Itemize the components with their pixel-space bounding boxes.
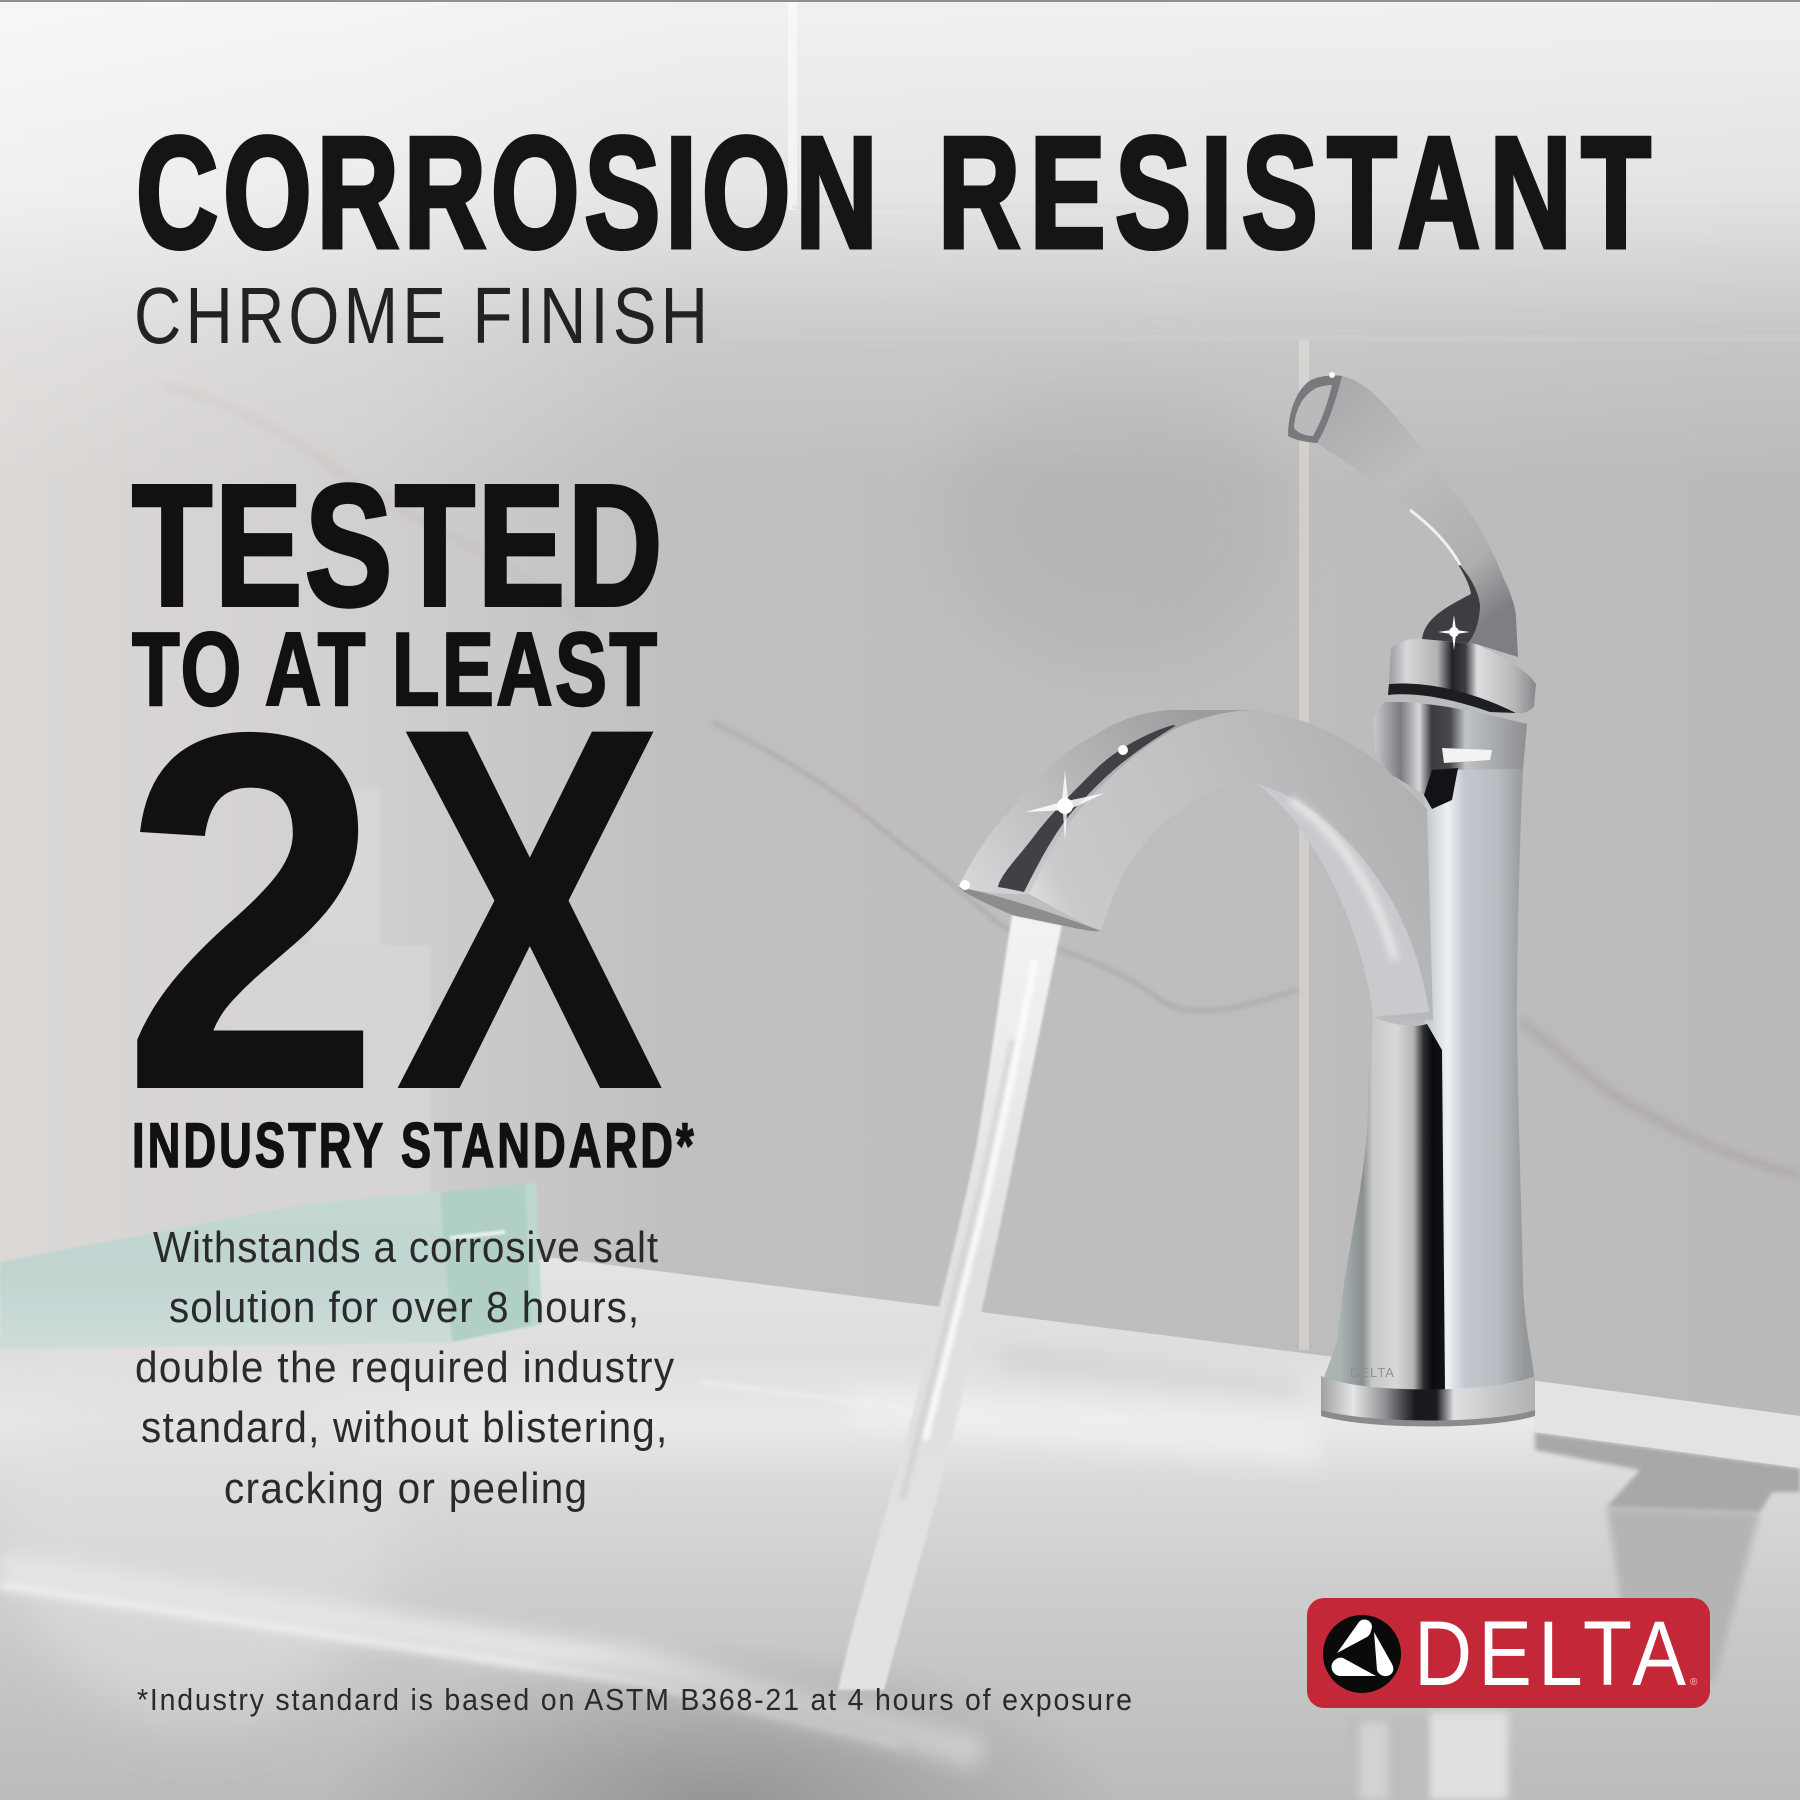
marble vein right: [1520, 1020, 1800, 1175]
footnote: *Industry standard is based on ASTM B368-21 at 4 hours of exposure: [137, 1683, 1132, 1717]
marble vein centre: [712, 722, 1298, 1011]
2X: X: [394, 619, 667, 1198]
tested: TESTED: [132, 448, 662, 642]
title: RESISTANT: [938, 105, 1651, 281]
Delta logo: [1307, 1598, 1710, 1708]
body text: [135, 1222, 675, 1512]
bottom shadow: [250, 1640, 1200, 1800]
registered mark: ®: [1690, 1677, 1698, 1688]
counter white ledge: [1530, 1380, 1800, 1468]
faucet shadow upper: [1535, 1432, 1800, 1512]
counter reflection: [1347, 1712, 1508, 1800]
handle end cap: [1288, 375, 1342, 443]
title: [136, 105, 1651, 281]
ring: [1389, 639, 1536, 713]
handle dark inner: [1422, 560, 1480, 643]
spout dark highlight: [998, 725, 1175, 892]
top wash: [0, 0, 1800, 480]
faucet shadow lower: [1607, 1507, 1760, 1695]
faucet: [958, 372, 1536, 1426]
counter left glow: [0, 1280, 400, 1720]
2X: [121, 619, 667, 1198]
spout aerator: [958, 887, 1101, 931]
spout underside reflection: [1257, 784, 1429, 1017]
logo mark: [1323, 1615, 1401, 1693]
counter top: [0, 1258, 1800, 1800]
faucet body upper: [1425, 769, 1535, 1392]
front lip: [0, 1568, 980, 1755]
ring gap: [1388, 683, 1516, 713]
to at least: TO AT LEAST: [132, 612, 657, 728]
tile grout vertical: [1299, 340, 1309, 1350]
tile grout top: [720, 335, 1800, 341]
wordmark: DELTA: [1414, 1603, 1686, 1705]
collar: [1373, 702, 1527, 795]
2X: 2: [121, 626, 382, 1196]
spout bevel: [958, 710, 1257, 894]
counter bright band: [850, 1385, 1320, 1465]
sparkles: [960, 372, 1470, 890]
black wedge on body: [1424, 768, 1458, 809]
handle: [1288, 375, 1518, 657]
body text: standard, without blistering,: [141, 1402, 667, 1451]
title: CORROSION: [136, 105, 878, 281]
body text: double the required industry: [135, 1342, 675, 1391]
faucet body lower left: [1321, 1017, 1445, 1392]
top edge: [0, 0, 1800, 2]
headline: tested to at least 2X: [121, 448, 694, 1198]
logo etched on body: DELTA: [1350, 1365, 1395, 1380]
water stream: [838, 915, 1062, 1690]
body text: Withstands a corrosive salt: [153, 1222, 658, 1271]
blurred bottles: [235, 790, 430, 1230]
spout face: [1029, 710, 1433, 1020]
collar highlight: [1442, 748, 1492, 763]
subtitle: CHROME FINISH: [134, 271, 708, 360]
counter dull band: [1000, 1345, 1300, 1398]
industry standard: INDUSTRY STANDARD*: [132, 1110, 694, 1181]
body text: solution for over 8 hours,: [169, 1282, 639, 1331]
faucet base: [1321, 1376, 1535, 1424]
blurred tube: [0, 1183, 542, 1349]
wall shadow near faucet: [940, 370, 1280, 670]
basin rim: [700, 1382, 1000, 1420]
marble vein left: [160, 385, 590, 620]
body text: cracking or peeling: [224, 1463, 587, 1512]
